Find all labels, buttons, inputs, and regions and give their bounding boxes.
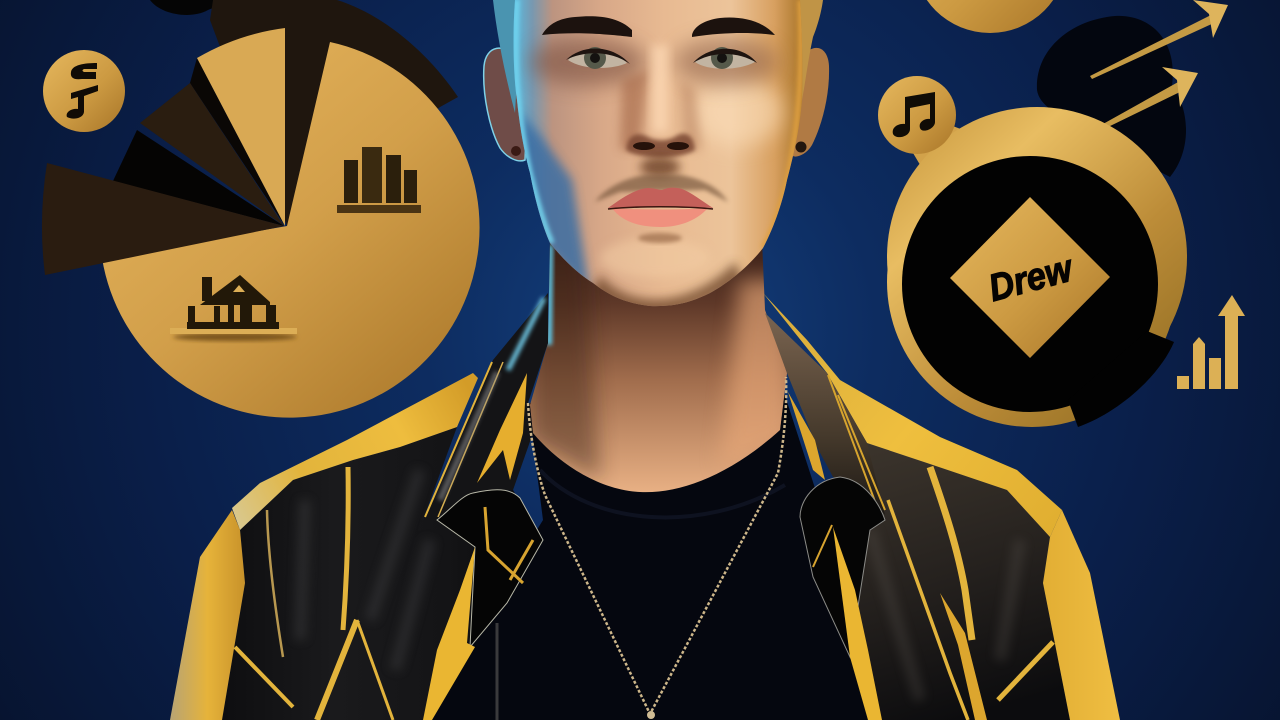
- left lapel gold cross: [485, 507, 533, 583]
- mouth line: [608, 207, 713, 209]
- black ring break: [1068, 331, 1174, 427]
- left collar highlights: [425, 298, 544, 517]
- right lapel: [800, 477, 885, 657]
- right sleeve: [1043, 510, 1120, 720]
- dark rear wedge: [210, 0, 458, 226]
- right collar: [765, 313, 885, 515]
- right collar gold strip: [788, 392, 825, 480]
- portrait: [170, 0, 1120, 720]
- diamond: [950, 197, 1110, 358]
- neck shading: [530, 240, 790, 480]
- earring right: [796, 142, 806, 152]
- pie chart panel: [42, 0, 480, 418]
- right jacket folds: [870, 530, 1020, 700]
- black inner disc: [902, 156, 1158, 412]
- top right gold circle: [913, 0, 1067, 33]
- right lapel gold line: [813, 525, 832, 567]
- neck: [530, 240, 787, 492]
- left jacket folds: [300, 470, 430, 670]
- left collar: [423, 293, 548, 520]
- chin dimple shadow: [638, 233, 682, 243]
- philtrum shadow: [640, 156, 680, 178]
- left ear: [484, 48, 528, 161]
- zipper line: [496, 623, 498, 720]
- dark gap behind wedges: [190, 58, 285, 226]
- right eyebrow: [692, 18, 775, 37]
- right jacket flame: [940, 593, 987, 720]
- diamond label: Drew: [985, 247, 1079, 310]
- left lapel flame: [423, 547, 475, 720]
- main gold pie slice: [102, 42, 480, 418]
- face: [514, 0, 802, 325]
- shirt collar seam: [540, 470, 785, 517]
- left eye: [566, 47, 630, 69]
- moustache: [595, 175, 728, 202]
- left collar gold flame: [477, 373, 527, 483]
- icon: music note left: [43, 50, 125, 132]
- lower lip: [612, 208, 708, 227]
- arrow top right: [1090, 0, 1228, 79]
- icon: growth bars with arrow: [1177, 295, 1245, 389]
- pendant: [647, 711, 655, 719]
- arrow lower right: [1103, 67, 1198, 128]
- face shading: [516, 0, 801, 325]
- right ear: [790, 48, 829, 157]
- hair right: [790, 0, 823, 100]
- left nostril: [633, 142, 655, 150]
- ring lower disc: [887, 137, 1177, 427]
- left eyebrow: [542, 16, 632, 37]
- black wedge: [113, 130, 284, 226]
- necklace: [528, 377, 786, 714]
- ring joint: [913, 125, 990, 185]
- right jacket body: [800, 443, 1070, 720]
- left lapel: [437, 490, 543, 647]
- icon: music note right: [878, 76, 956, 154]
- left sleeve: [170, 510, 245, 720]
- ring upper disc: [887, 107, 1187, 407]
- shoulder yoke right: [763, 293, 1062, 537]
- left jacket body: [222, 427, 543, 720]
- dark wedge left: [42, 163, 284, 275]
- black blob top left: [150, 0, 232, 15]
- right eye: [693, 47, 757, 69]
- right nostril: [667, 142, 689, 150]
- icon: house: [170, 275, 297, 341]
- icon: city buildings: [337, 147, 421, 213]
- t-shirt: [420, 380, 890, 720]
- brown wedge top: [140, 83, 284, 226]
- hair left: [493, 0, 530, 113]
- right lapel flame: [833, 527, 882, 720]
- gold ring badge: [887, 107, 1187, 427]
- nose underside: [626, 134, 695, 158]
- face base: [514, 0, 802, 306]
- shoulder yoke left: [232, 373, 478, 530]
- gold wedge: [197, 28, 285, 226]
- black blob behind arrows: [1037, 16, 1186, 177]
- earring left: [511, 146, 521, 156]
- upper lip: [608, 188, 713, 208]
- right collar thin lines: [828, 375, 885, 515]
- jacket gold stripes: [235, 467, 1053, 720]
